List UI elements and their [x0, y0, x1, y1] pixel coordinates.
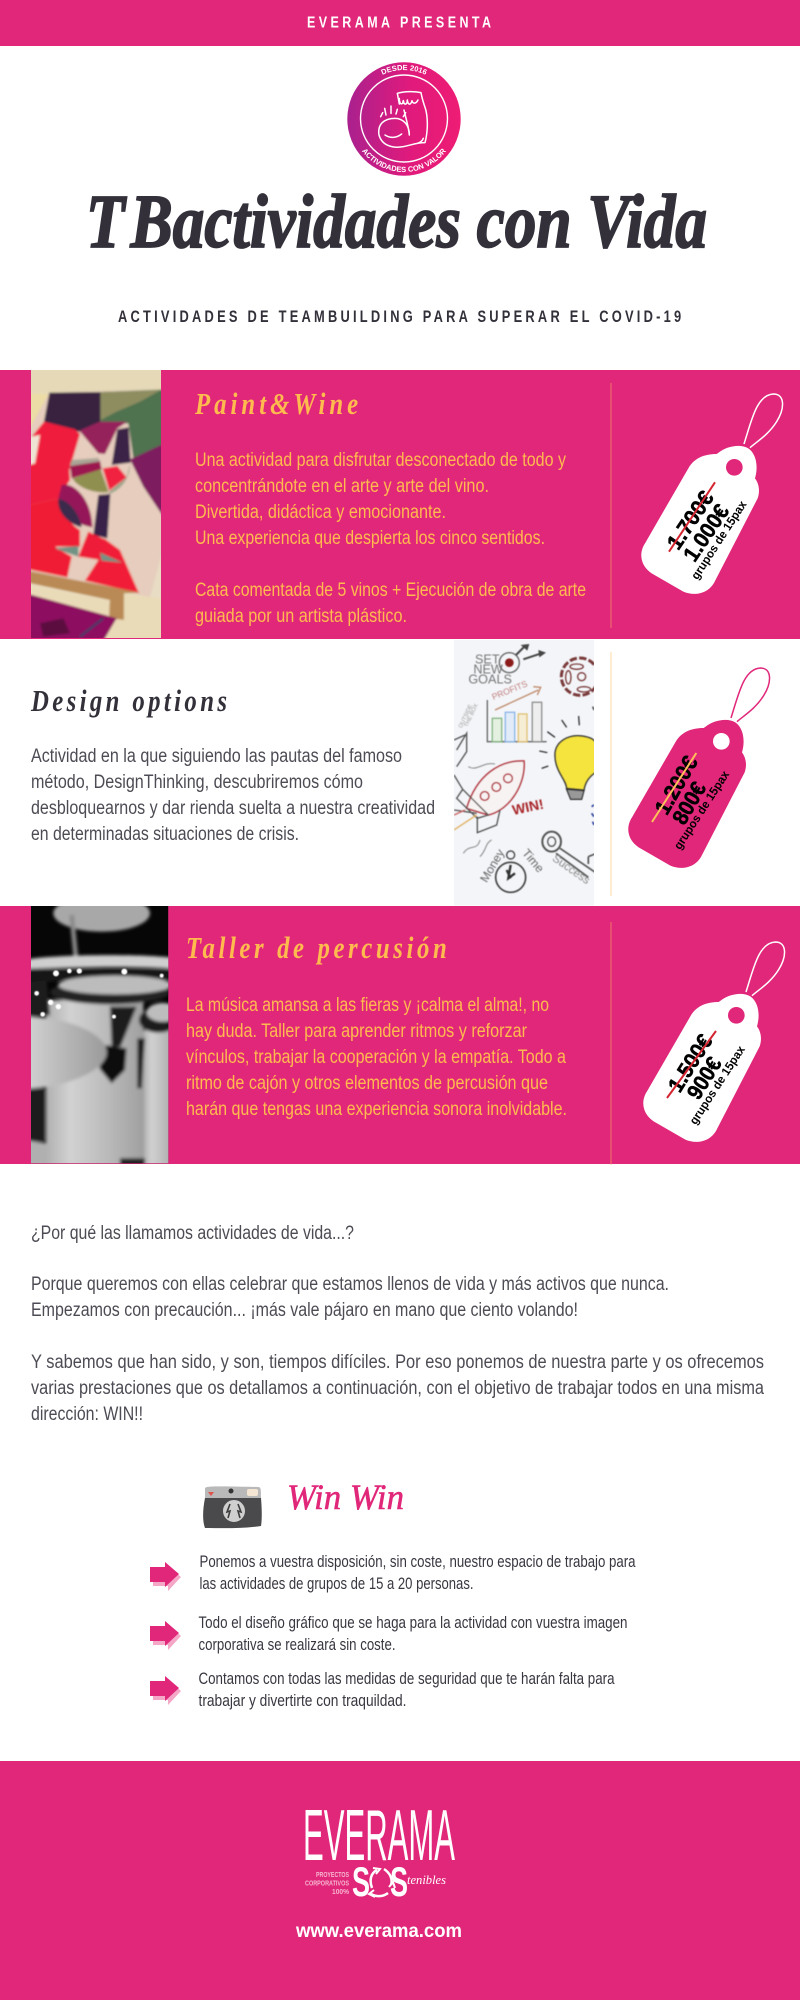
header bar	[0, 0, 800, 46]
price tag: 1.700 to 1.000: 1.700€	[662, 486, 719, 554]
price tag: 1.700 to 1.000	[641, 394, 783, 594]
heading: Design options	[30, 684, 227, 719]
price tag: 1.500 to 900	[643, 942, 785, 1142]
Everama logo	[303, 1796, 455, 1905]
description text: ritmo de cajón y otros elementos de percusión que	[186, 1073, 548, 1094]
icon: arrow	[150, 1562, 181, 1591]
benefit list	[150, 1553, 636, 1710]
item 1: las actividades de grupos de 15 a 20 personas.	[200, 1575, 474, 1593]
intro text block: ¿Por qué las llamamos actividades de vida...?	[31, 1223, 354, 1244]
logo badge: ACTIVIDADES CON VALOR	[362, 148, 446, 172]
image: business sketches: Time	[519, 846, 547, 876]
description text: Una actividad para disfrutar desconectado de todo y	[195, 450, 566, 471]
price tag: 1.500 to 900: 900€	[682, 1052, 727, 1104]
image: business sketches: Success	[550, 853, 592, 887]
heading: Taller de percusión	[186, 931, 447, 966]
intro text block	[31, 1223, 764, 1425]
website: www.everama.com	[295, 1921, 462, 1942]
icon: camera	[203, 1486, 262, 1528]
description text: Cata comentada de 5 vinos + Ejecución de obra de arte	[195, 580, 586, 601]
icon: recycle arrows	[369, 1868, 395, 1897]
description text	[31, 746, 435, 845]
image: business sketches: GOALS	[468, 672, 512, 686]
Everama logo: PROYECTOS	[316, 1870, 349, 1879]
image: business sketches	[454, 640, 599, 906]
description text: desbloquearnos y dar rienda suelta a nuestra creatividad	[31, 798, 435, 819]
description text: harán que tengas una experiencia sonora inolvidable.	[186, 1099, 567, 1120]
item 1: Ponemos a vuestra disposición, sin coste, nuestro espacio de trabajo para	[200, 1553, 636, 1571]
description text: Divertida, didáctica y emocionante.	[195, 502, 446, 523]
panel: Paint&Wine	[0, 363, 800, 647]
Everama logo: CORPORATIVOS	[305, 1878, 349, 1888]
image: business sketches: SET	[475, 652, 500, 666]
item 3: Contamos con todas las medidas de seguridad que te harán falta para	[198, 1670, 615, 1688]
price tag: 1.200 to 800: grupos de 15pax	[671, 768, 732, 852]
description text: en determinadas situaciones de crisis.	[31, 824, 299, 845]
photo: conga drums	[31, 906, 168, 1164]
subtitle: ACTIVIDADES DE TEAMBUILDING PARA SUPERAR EL COVID-19	[118, 309, 681, 326]
intro text block: dirección: WIN!!	[31, 1404, 143, 1425]
image: business sketches: Money	[477, 847, 507, 885]
item 2: Todo el diseño gráfico que se haga para la actividad con vuestra imagen	[198, 1614, 628, 1632]
footer: EVERAMA	[303, 1796, 455, 1876]
intro text block: Empezamos con precaución... ¡más vale pájaro en mano que ciento volando!	[31, 1300, 578, 1321]
Everama logo: 100%	[332, 1887, 349, 1896]
footer	[0, 1761, 800, 2000]
description text: guiada por un artista plástico.	[195, 606, 407, 627]
item 3: trabajar y divertirte con traquildad.	[198, 1692, 406, 1710]
item 2: corporativa se realizará sin coste.	[198, 1636, 396, 1654]
description text	[195, 450, 586, 627]
photo: painting of a wine glass	[31, 370, 161, 638]
item 1	[150, 1553, 636, 1593]
description text: Una experiencia que despierta los cinco sentidos.	[195, 528, 545, 549]
image: business sketches: THE BOX	[464, 703, 480, 728]
logo badge: DESDE 2016	[380, 64, 427, 75]
item 2	[150, 1614, 628, 1654]
heading: Win Win: Win Win	[287, 1477, 404, 1517]
price tag: 1.200 to 800: 800€	[667, 777, 711, 829]
Everama logo: S	[390, 1858, 408, 1905]
image: business sketches: OUTSIDE	[458, 704, 474, 729]
heading: Paint&Wine	[194, 387, 358, 422]
price tag: 1.700 to 1.000: grupos de 15pax	[688, 498, 750, 582]
intro text block: Porque queremos con ellas celebrar que estamos llenos de vida y más activos que nunca.	[31, 1274, 669, 1295]
price tag: 1.500 to 900: grupos de 15pax	[687, 1043, 748, 1127]
Everama logo: tenibles	[407, 1872, 446, 1887]
icon: arrow	[150, 1676, 181, 1705]
header bar: EVERAMA PRESENTA	[307, 14, 491, 32]
description text: hay duda. Taller para aprender ritmos y reforzar	[186, 1021, 528, 1042]
logo badge	[347, 62, 461, 176]
description text: método, DesignThinking, descubriremos cómo	[31, 772, 363, 793]
panel: Design options	[0, 639, 800, 906]
panel: Taller de percusión	[0, 895, 800, 1172]
icon: flexed arm	[379, 92, 427, 147]
image: business sketches: WIN!	[511, 796, 545, 818]
description text: concentrándote en el arte y arte del vino.	[195, 476, 489, 497]
image: business sketches: PROFITS	[490, 678, 529, 702]
image: business sketches: NEW	[473, 662, 503, 676]
icon: arrow	[150, 1621, 181, 1650]
Everama logo: S	[352, 1858, 370, 1905]
price tag: 1.200 to 800: 1.200€	[650, 751, 703, 819]
description text: La música amansa a las fieras y ¡calma el alma!, no	[186, 995, 549, 1016]
price tag: 1.700 to 1.000: 1.000€	[678, 500, 734, 566]
description text	[186, 995, 567, 1120]
description text: vínculos, trabajar la cooperación y la empatía. Todo a	[186, 1047, 566, 1068]
price tag: 1.200 to 800	[628, 668, 770, 868]
item 3	[150, 1670, 615, 1710]
description text: Actividad en la que siguiendo las pautas del famoso	[31, 746, 402, 767]
price tag: 1.500 to 900: 1.500€	[663, 1030, 718, 1097]
